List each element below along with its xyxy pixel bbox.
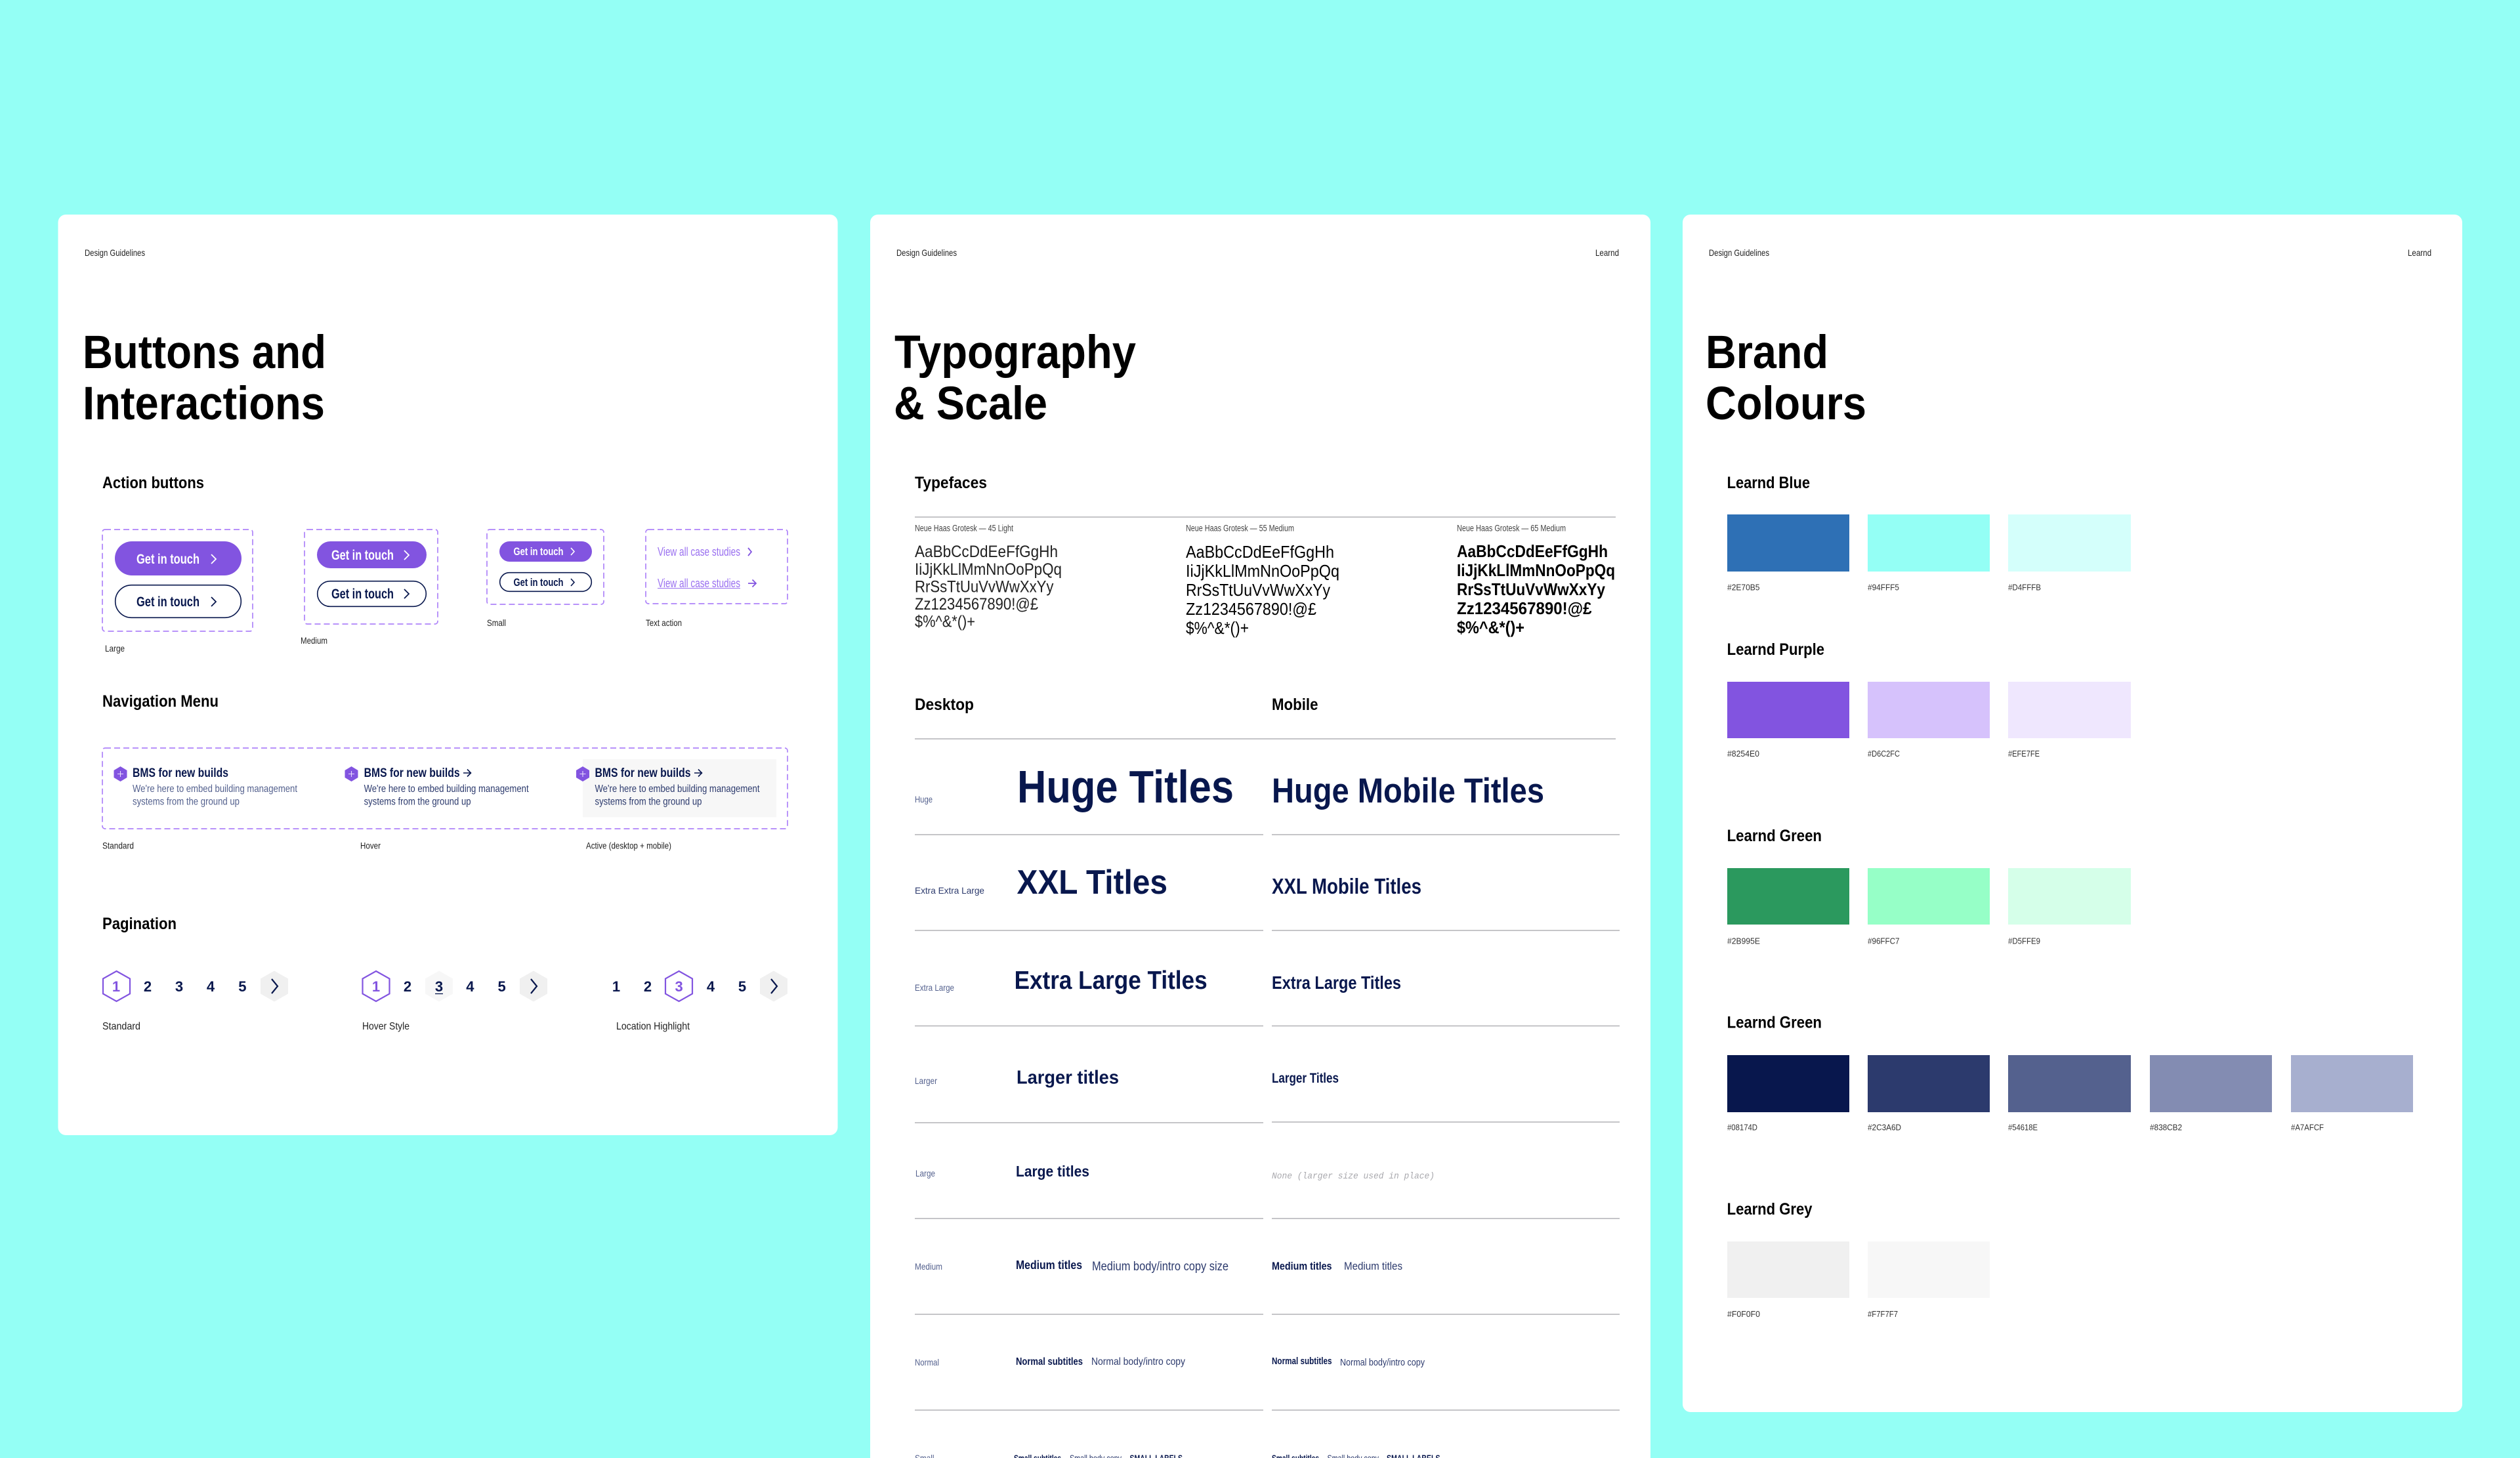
typeface specimen: 65 medium: $%^&*()+ <box>1457 617 1524 637</box>
nav item: active: BMS for new builds <box>595 766 690 780</box>
colour group: learnd green <box>1727 827 2131 946</box>
running header <box>1709 247 2431 258</box>
scale row: medium: Medium body/intro copy size <box>1092 1260 1228 1274</box>
pagination: hover style <box>362 971 547 1032</box>
pagination: location highlight: 2 <box>644 978 652 995</box>
colour group: learnd blue <box>1727 474 2131 592</box>
colour group: navy tints (labelled Learnd Green): #838CB2 <box>2150 1122 2182 1133</box>
scale row: larger: Larger titles <box>1017 1067 1119 1088</box>
title <box>894 327 1136 430</box>
panel: typography and scale <box>870 215 1650 1458</box>
text link with chevron: View all case studies <box>658 545 740 558</box>
colour group: learnd blue: #D4FFFB <box>2008 583 2041 592</box>
button: small outline: Get in touch <box>513 576 563 589</box>
scale row: extra extra large <box>915 864 1421 902</box>
running header <box>896 247 1619 258</box>
button: small filled: Get in touch <box>513 545 563 558</box>
heading: mobile: Mobile <box>1272 696 1318 714</box>
scale row: extra extra large: XXL Mobile Titles <box>1272 874 1421 898</box>
colour group: learnd green: #D5FFE9 <box>2008 936 2040 946</box>
nav item: hover: BMS for new builds <box>364 766 460 780</box>
scale row: huge <box>915 761 1544 812</box>
scale row: extra large: Extra Large Titles <box>1015 967 1208 995</box>
running header: Design Guidelines <box>85 247 145 258</box>
scale row: medium <box>915 1259 1402 1274</box>
nav item: active <box>576 759 776 818</box>
running header: Learnd <box>2408 247 2431 258</box>
typeface specimen: 65 medium: IiJjKkLlMmNnOoPpQq <box>1457 560 1615 580</box>
navigation menu states <box>102 748 788 829</box>
colour group: navy tints (labelled Learnd Green) <box>1727 1013 2413 1133</box>
small buttons group <box>487 530 604 628</box>
typeface specimen: 55 medium: $%^&*()+ <box>1186 618 1249 638</box>
nav item: hover: systems from the ground up <box>364 797 471 807</box>
colour group: navy tints (labelled Learnd Green): Learnd Green <box>1727 1013 1822 1031</box>
title: & Scale <box>894 378 1047 430</box>
scale row: extra extra large: XXL Titles <box>1017 864 1167 902</box>
pagination: standard: 2 <box>144 978 152 995</box>
scale row: normal <box>915 1356 1425 1368</box>
button: large outline: Get in touch <box>136 594 200 610</box>
scale row: small (cropped by page edge) <box>915 1453 1440 1458</box>
colour group: learnd green: #2B995E <box>1727 936 1760 946</box>
pagination: location highlight: 4 <box>707 978 715 995</box>
nav state labels <box>102 840 671 850</box>
typeface specimen: 55 medium: RrSsTtUuVvWwXxYy <box>1186 580 1330 600</box>
button: large filled: Get in touch <box>136 552 200 567</box>
pagination: standard: 4 <box>207 978 215 995</box>
nav item: active: systems from the ground up <box>595 797 702 807</box>
label: Hover Style <box>362 1021 410 1032</box>
button: large outline <box>116 585 241 617</box>
typeface specimen: 55 medium: Zz1234567890!@£ <box>1186 599 1316 619</box>
colour group: navy tints (labelled Learnd Green): #08174D <box>1727 1122 1757 1133</box>
label: small: Small <box>487 617 506 628</box>
pagination: location highlight: 5 <box>738 978 746 995</box>
scale row: normal: Normal body/intro copy <box>1091 1356 1185 1367</box>
heading: typefaces: Typefaces <box>915 474 987 492</box>
typeface specimen: 45 light <box>915 524 1062 631</box>
scale row: normal: Normal body/intro copy <box>1340 1357 1425 1368</box>
nav item: hover <box>345 766 529 807</box>
label: large: Large <box>105 643 125 654</box>
typeface specimen: 45 light: AaBbCcDdEeFfGgHh <box>915 543 1058 561</box>
colour group: learnd purple: Learnd Purple <box>1727 640 1824 659</box>
scale row: medium: Medium titles <box>1016 1259 1082 1272</box>
text action group <box>646 530 788 628</box>
scale row: normal: Normal subtitles <box>1272 1356 1332 1367</box>
label: Location Highlight <box>616 1021 690 1032</box>
typeface specimen: 55 medium <box>1186 524 1339 638</box>
button: medium filled: Get in touch <box>331 548 394 563</box>
typeface specimen: 45 light: $%^&*()+ <box>915 613 975 631</box>
scale row: large: Large titles <box>1016 1163 1089 1180</box>
scale row: normal: Normal <box>915 1357 939 1367</box>
pagination: standard: 1 <box>112 978 120 995</box>
scale row: normal: Normal subtitles <box>1016 1356 1083 1367</box>
nav state labels: Hover <box>360 840 381 850</box>
nav item: standard: systems from the ground up <box>133 797 240 807</box>
pagination: location highlight: 1 <box>612 978 620 995</box>
label: medium: Medium <box>301 635 327 646</box>
pagination: hover style: 2 <box>404 978 411 995</box>
text link with arrow: View all case studies <box>658 577 740 590</box>
scale row: huge: Huge Titles <box>1017 761 1234 812</box>
button: medium filled <box>317 541 427 568</box>
pagination: location highlight: 3 <box>675 978 683 995</box>
colour group: navy tints (labelled Learnd Green): #2C3A6D <box>1868 1122 1901 1133</box>
typeface specimen: 55 medium: IiJjKkLlMmNnOoPpQq <box>1186 561 1339 581</box>
title: Colours <box>1706 378 1866 430</box>
nav item: active: We're here to embed building management <box>595 783 760 795</box>
scale row: medium: Medium titles <box>1272 1260 1332 1272</box>
typeface specimen: 45 light: Zz1234567890!@£ <box>915 595 1038 614</box>
typeface specimen: 65 medium: AaBbCcDdEeFfGgHh <box>1457 541 1608 561</box>
title: Interactions <box>83 378 325 430</box>
nav item: standard <box>114 766 297 807</box>
colour group: navy tints (labelled Learnd Green): #A7AFCF <box>2291 1122 2324 1133</box>
pagination: hover style: 1 <box>372 978 380 995</box>
scale row: medium: Medium <box>915 1261 942 1272</box>
button: small outline <box>500 573 591 591</box>
colour group: learnd purple: #EFE7FE <box>2008 749 2040 759</box>
scale row: huge: Huge <box>915 794 933 804</box>
typeface specimen: 65 medium: Zz1234567890!@£ <box>1457 598 1592 618</box>
typeface specimen: 65 medium: Neue Haas Grotesk — 65 Medium <box>1457 524 1566 533</box>
nav state labels: Active (desktop + mobile) <box>586 840 671 850</box>
title: Brand <box>1706 327 1828 379</box>
heading: desktop: Desktop <box>915 696 974 714</box>
pagination: hover style: 5 <box>497 978 506 995</box>
typeface specimen: 65 medium <box>1457 524 1615 637</box>
typeface specimen: 65 medium: RrSsTtUuVvWwXxYy <box>1457 579 1605 599</box>
title <box>83 327 326 430</box>
label: Standard <box>102 1021 140 1032</box>
button: medium outline: Get in touch <box>331 587 394 602</box>
scale row: large <box>915 1163 1435 1182</box>
scale row: larger <box>915 1067 1339 1088</box>
typeface specimen: 45 light: IiJjKkLlMmNnOoPpQq <box>915 560 1062 579</box>
colour group: learnd purple: #D6C2FC <box>1868 749 1900 759</box>
scale row: large: None (larger size used in place) <box>1272 1171 1435 1182</box>
heading: pagination: Pagination <box>102 915 177 933</box>
scale row: larger: Larger Titles <box>1272 1071 1339 1086</box>
nav item: hover: We're here to embed building management <box>364 783 529 795</box>
running header: Design Guidelines <box>1709 247 1769 258</box>
heading: navigation menu: Navigation Menu <box>102 692 219 711</box>
scale row: medium: Medium titles <box>1344 1260 1402 1272</box>
colour group: learnd green: Learnd Green <box>1727 827 1822 845</box>
pagination: hover style: 4 <box>466 978 474 995</box>
nav item: standard: BMS for new builds <box>133 766 228 780</box>
button: small filled <box>499 541 592 562</box>
medium buttons group <box>301 530 438 646</box>
colour group: learnd grey: #F0F0F0 <box>1727 1309 1760 1319</box>
scale row: huge: Huge Mobile Titles <box>1272 772 1544 810</box>
heading: action buttons: Action buttons <box>102 474 204 492</box>
colour group: learnd purple <box>1727 640 2131 759</box>
colour group: learnd grey: #F7F7F7 <box>1868 1309 1898 1319</box>
scale row: extra extra large: Extra Extra Large <box>915 885 984 896</box>
typeface specimen: 55 medium: AaBbCcDdEeFfGgHh <box>1186 542 1334 562</box>
colour group: navy tints (labelled Learnd Green): #54618E <box>2008 1122 2038 1133</box>
scale row: large: Large <box>915 1168 935 1178</box>
colour group: learnd purple: #8254E0 <box>1727 749 1759 759</box>
colour group: learnd grey <box>1727 1200 1990 1319</box>
title: Buttons and <box>83 327 326 379</box>
typeface specimen: 45 light: Neue Haas Grotesk — 45 Light <box>915 524 1013 533</box>
label: text action: Text action <box>646 617 682 628</box>
typeface specimen: 45 light: RrSsTtUuVvWwXxYy <box>915 578 1054 596</box>
colour group: learnd grey: Learnd Grey <box>1727 1200 1813 1218</box>
large buttons group <box>102 530 253 654</box>
title <box>1706 327 1866 430</box>
pagination: standard: 3 <box>175 978 183 995</box>
button: large filled <box>115 541 242 575</box>
pagination: hover style: 3 <box>435 978 443 995</box>
running header: Learnd <box>1595 247 1619 258</box>
nav item: standard: We're here to embed building management <box>133 783 297 795</box>
colour group: learnd green: #96FFC7 <box>1868 936 1899 946</box>
pagination: standard: 5 <box>238 978 247 995</box>
panel: buttons and interactions <box>58 215 837 1135</box>
pagination: location highlight <box>612 971 788 1032</box>
colour group: learnd blue: #2E70B5 <box>1727 583 1760 592</box>
scale row: extra large: Extra Large Titles <box>1272 972 1401 993</box>
pagination: standard <box>102 971 288 1032</box>
colour group: learnd blue: #94FFF5 <box>1868 583 1899 592</box>
scale row: larger: Larger <box>915 1075 937 1086</box>
title: Typography <box>894 327 1136 379</box>
nav state labels: Standard <box>102 840 134 850</box>
scale row: extra large: Extra Large <box>915 982 954 993</box>
colour group: learnd blue: Learnd Blue <box>1727 474 1810 492</box>
button: medium outline <box>318 581 426 606</box>
running header: Design Guidelines <box>896 247 957 258</box>
typeface specimen: 55 medium: Neue Haas Grotesk — 55 Medium <box>1186 524 1294 533</box>
panel: brand colours <box>1683 215 2462 1412</box>
scale row: extra large <box>915 967 1401 995</box>
